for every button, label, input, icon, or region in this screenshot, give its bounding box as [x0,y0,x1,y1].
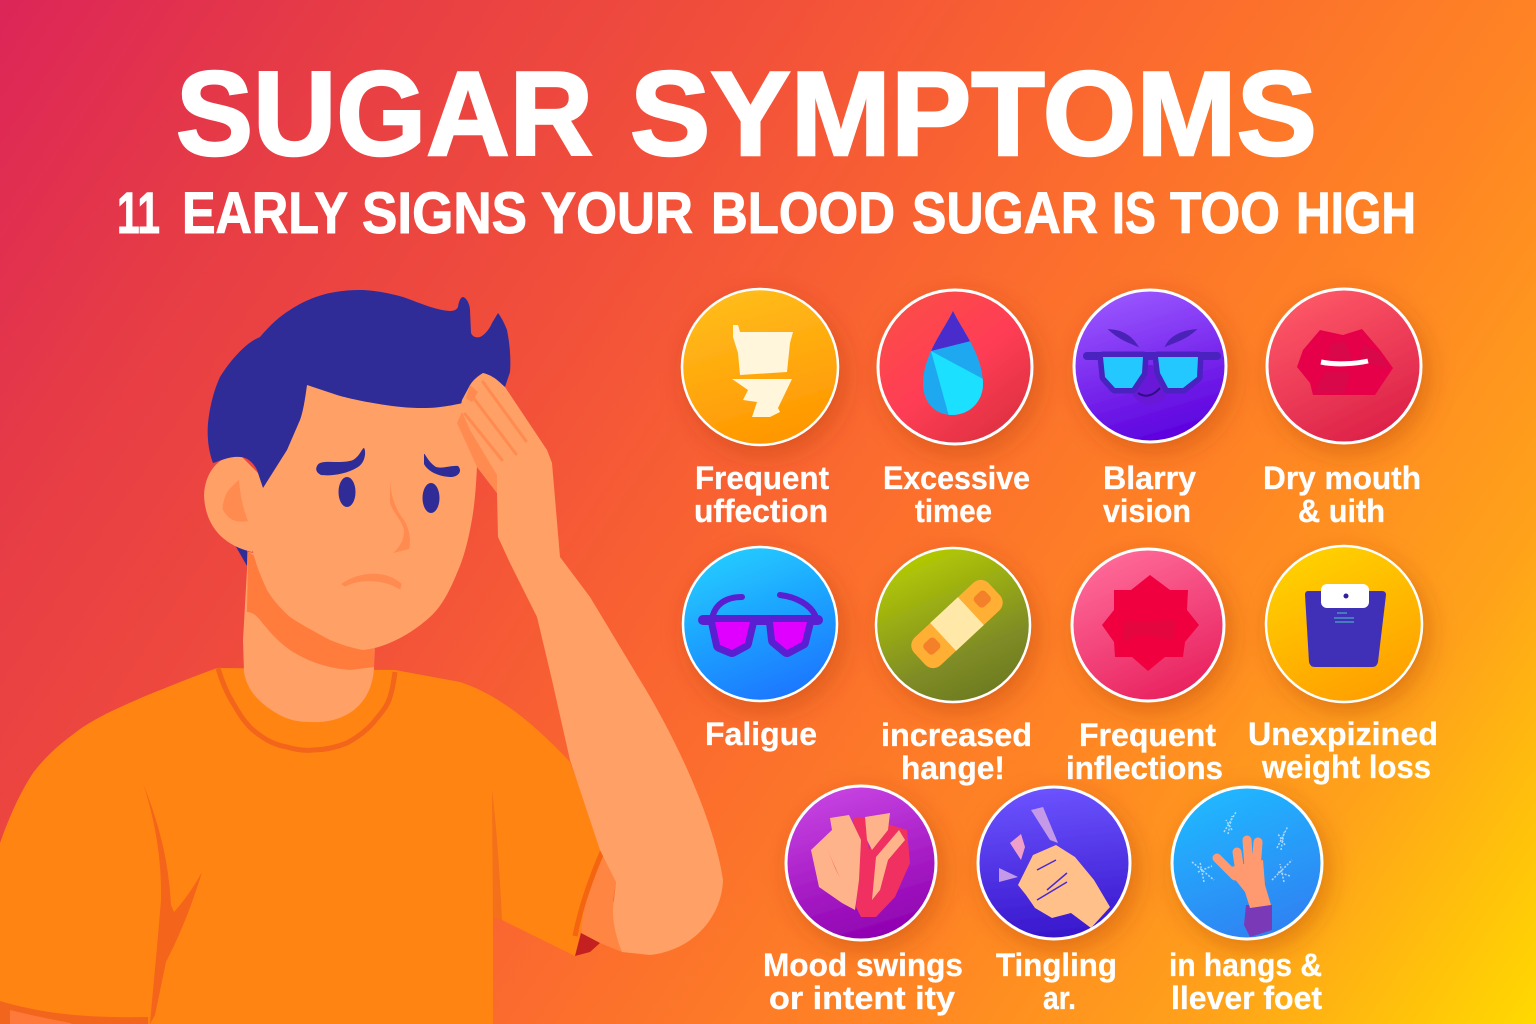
label: or intent ity [769,980,955,1016]
symptom 7: frequent infections [1066,549,1224,786]
fingers [457,382,526,493]
icon: lips [1297,329,1393,395]
eyes [338,477,356,507]
badge [1072,549,1224,701]
neck [243,552,375,722]
symptom 11: numbness in hands and feet [1169,787,1322,1016]
symptom 6: increased hunger [876,548,1032,786]
icon: bandage [907,575,1007,673]
label: Excessive [883,460,1030,496]
label: Mood swings [763,947,963,983]
label: timee [915,493,992,529]
badge [1172,787,1322,939]
ear [204,456,270,552]
underarm gap with shadow [581,850,622,952]
subtitle: TOO [1170,181,1280,246]
symptom 5: fatigue [683,547,837,752]
badge [1266,546,1422,702]
title: SUGAR [176,47,593,181]
icon: water drop [923,311,983,415]
badge [978,787,1130,939]
label: uffection [694,493,828,529]
hair [208,290,510,488]
title: SYMPTOMS [630,47,1317,181]
nose [390,482,410,553]
label: & uith [1298,493,1385,529]
shirt [0,668,603,1024]
badge [683,547,837,701]
subtitle: IS [1112,181,1156,246]
label: increased [881,717,1032,753]
person illustration: worried man holding his head [0,290,723,1024]
badge [1074,290,1226,442]
badge [878,290,1032,444]
badge [786,786,936,940]
badge [1267,289,1421,443]
eyebrows [316,448,460,477]
label: Faligue [705,716,817,752]
subtitle: SIGNS [362,181,527,246]
icon: toilet [732,325,793,417]
label: vision [1103,493,1191,529]
symptom 2: excessive thirst [878,290,1032,529]
label: Frequent [1079,717,1216,753]
label: in hangs & [1169,947,1322,983]
label: weight loss [1261,749,1431,785]
icon: hand with sparkles [1192,812,1292,937]
symptom 8: unexplained weight loss [1248,546,1438,785]
icon: hand with needle [999,807,1110,928]
badge [876,548,1030,702]
back of hair [235,530,247,566]
icon: burst [1102,575,1199,671]
icon: glasses [703,595,818,650]
subtitle: HIGH [1296,181,1416,246]
symptom 4: dry mouth [1263,289,1421,529]
icon: weighing scale [1305,584,1386,667]
label: inflections [1066,750,1223,786]
subtitle: EARLY [182,181,347,246]
subtitle: BLOOD [711,181,895,246]
mouth [342,574,401,589]
sleeve and body fold lines [143,783,202,1024]
subtitle: YOUR [541,181,693,246]
icon: face with sunglasses [1087,331,1217,405]
label: Blarry [1103,460,1196,496]
inner ear [223,480,248,522]
label: Frequent [695,460,829,496]
symptom 1: frequent urination [682,289,838,529]
shirt collar [218,668,395,750]
label: llever foet [1171,980,1322,1016]
symptom 3: blurry vision [1074,290,1226,529]
symptom 10: tingling [978,787,1130,1016]
icon: brain-like blob [811,813,910,917]
neck shadow [247,552,374,670]
label: Tingling [996,947,1117,983]
label: hange! [901,750,1005,786]
face [240,385,477,650]
label: Unexpizined [1248,716,1438,752]
label: ar. [1043,980,1076,1016]
subtitle: 11 [117,181,160,246]
symptom 9: mood swings [763,786,963,1016]
arm and hand [457,373,723,955]
badge [682,289,838,445]
subtitle: SUGAR [912,181,1098,246]
label: Dry mouth [1263,460,1421,496]
